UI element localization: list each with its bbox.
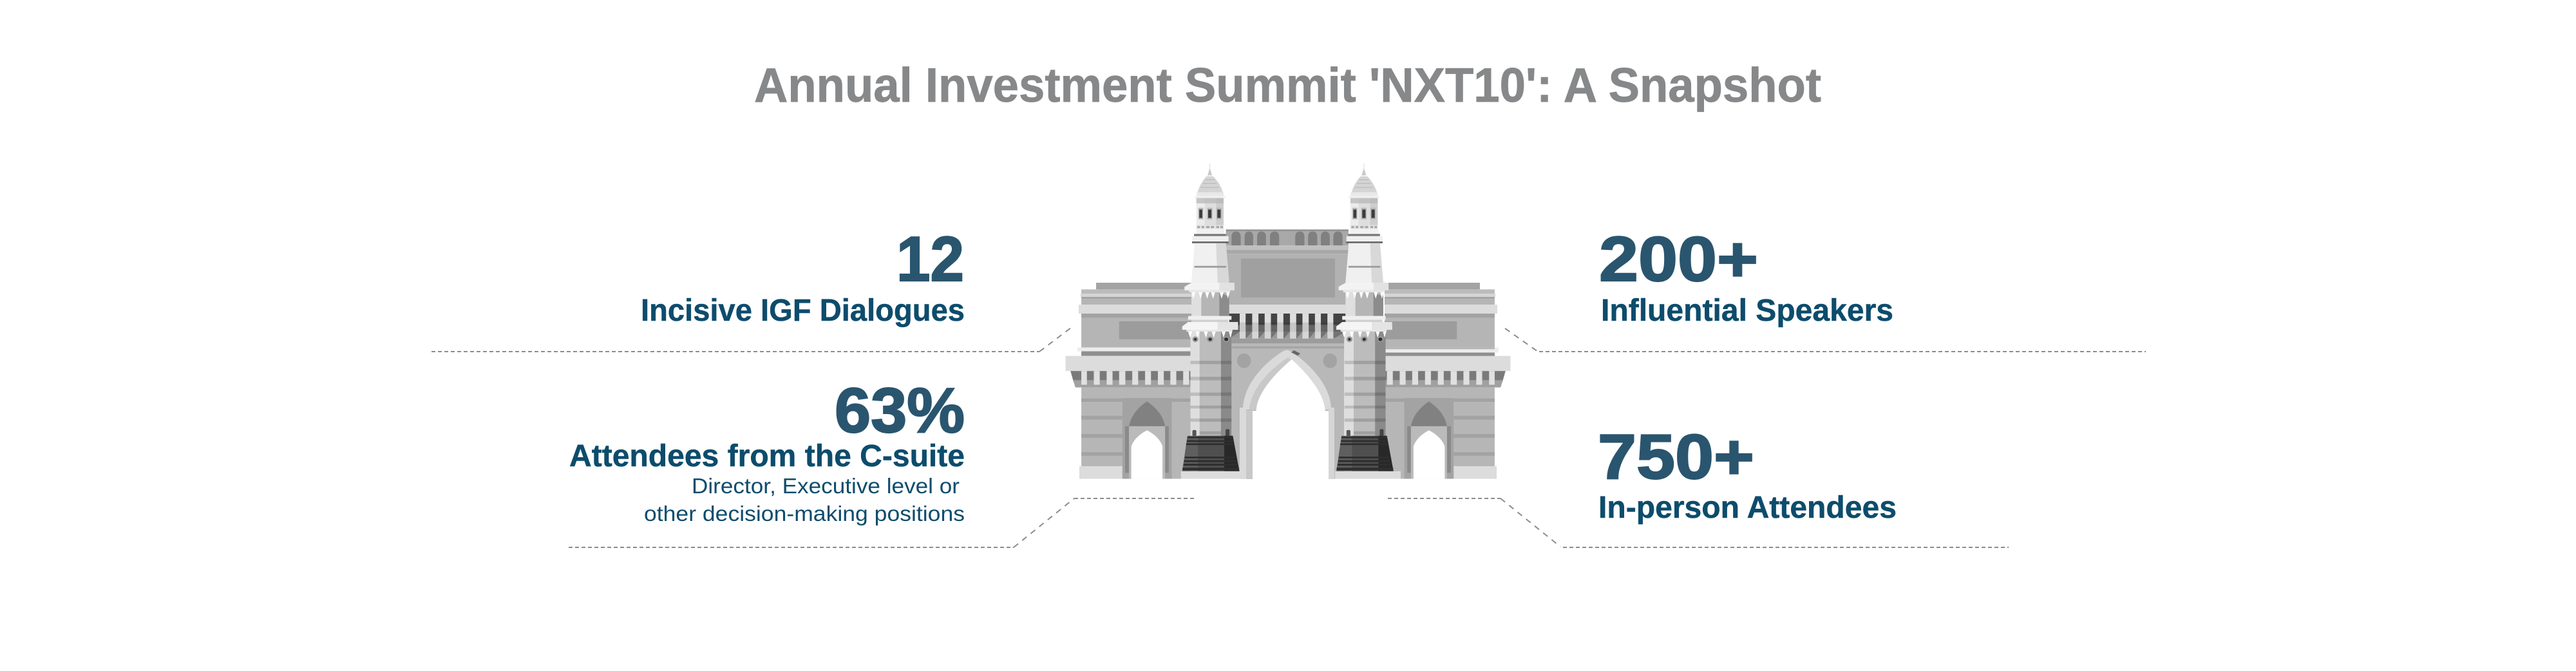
illustration: Gateway of India monument — [1066, 164, 1510, 479]
leader line — [431, 328, 1071, 352]
label: In-person Attendees — [1598, 491, 1897, 525]
central attic storey — [1226, 229, 1349, 314]
number 200+: 200+ — [1599, 223, 1758, 294]
right wing — [1385, 283, 1510, 479]
description line 2: other decision-making positions — [644, 502, 965, 525]
monument body — [1066, 164, 1510, 479]
leader line — [1505, 328, 2146, 352]
stat: 200+ Influential Speakers — [1505, 223, 2146, 352]
stat: 12 Incisive IGF Dialogues — [431, 223, 1071, 352]
number 63%: 63% — [835, 375, 965, 446]
description line 1: Director, Executive level or — [692, 474, 960, 498]
stat: 63% Attendees from the C-suite — [569, 375, 1195, 547]
right minaret — [1335, 164, 1401, 479]
leader line — [1388, 498, 2009, 547]
stat: 750+ In-person Attendees — [1388, 421, 2009, 547]
left wing — [1066, 283, 1191, 479]
leader line — [569, 498, 1195, 547]
left minaret — [1181, 164, 1247, 479]
number 12: 12 — [896, 223, 964, 294]
title: Annual Investment Summit 'NXT10': A Snapshot — [754, 58, 1821, 112]
label: Attendees from the C-suite — [569, 439, 965, 473]
arch wall with roundels — [1231, 339, 1344, 479]
label: Incisive IGF Dialogues — [641, 294, 965, 328]
central pointed archway — [1240, 350, 1334, 479]
central colonnade — [1229, 314, 1346, 339]
label: Influential Speakers — [1601, 294, 1893, 328]
number 750+: 750+ — [1598, 421, 1754, 492]
